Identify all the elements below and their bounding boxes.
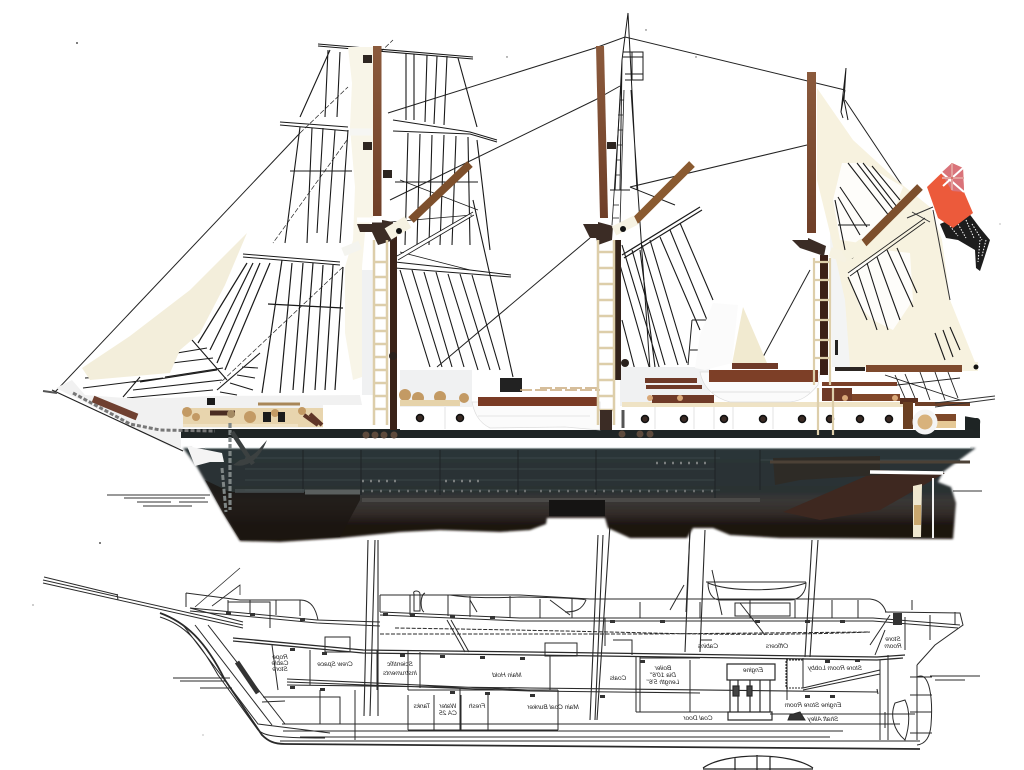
bow white structure xyxy=(43,380,362,466)
mirrored compartment labels: Water xyxy=(439,703,457,710)
ladders xyxy=(447,600,890,652)
fore sail strip xyxy=(345,47,375,395)
mirrored compartment labels: Coals xyxy=(609,675,626,682)
masts through hull xyxy=(364,525,818,720)
mirrored compartment labels: Main Coal Bunker xyxy=(526,704,579,711)
aft sail with rigging windows xyxy=(817,88,977,367)
anchor and chain xyxy=(222,410,267,512)
main mast base fitting xyxy=(600,410,623,430)
small boat at bottom edge xyxy=(703,755,813,770)
fore lower yard xyxy=(243,254,511,277)
jib sail xyxy=(82,233,247,380)
lifeboat on davits xyxy=(708,583,806,616)
water lines behind model hull xyxy=(107,491,982,506)
deck fittings xyxy=(182,378,995,432)
mirrored compartment labels: Rope xyxy=(272,654,288,661)
mirrored compartment labels: Room xyxy=(884,643,902,650)
rudder head rigging xyxy=(885,372,960,400)
bulwark with portholes xyxy=(400,367,912,430)
mirrored compartment labels: Length 5'6" xyxy=(646,679,679,686)
mirrored compartment labels: Cable xyxy=(271,660,288,667)
model hull xyxy=(183,448,976,542)
mirrored compartment labels: Boiler xyxy=(654,665,671,672)
mizzen ladder xyxy=(814,258,833,435)
hatches xyxy=(325,603,765,658)
main mast xyxy=(583,46,692,380)
fore upper yard xyxy=(318,44,473,59)
propeller shaft and screw xyxy=(770,676,932,745)
mirrored compartment labels: Instruments xyxy=(382,670,417,677)
hull planking xyxy=(245,450,960,500)
mizzen mast xyxy=(792,72,920,375)
stern wedge xyxy=(783,470,945,520)
rivet row xyxy=(362,490,713,492)
mirrored compartment labels: Officers xyxy=(765,643,788,650)
stern xyxy=(875,600,963,665)
mirrored compartment labels: Store xyxy=(272,666,288,673)
mirrored compartment labels: Dia 10'6" xyxy=(649,672,676,679)
rigging stays xyxy=(55,37,903,392)
mirrored compartment labels: Crew Space xyxy=(317,661,353,668)
plan waterline xyxy=(173,676,980,688)
brown bowsprit spar xyxy=(93,399,137,417)
fore brown spars xyxy=(343,132,470,252)
mirrored compartment labels: Fresh xyxy=(468,703,485,710)
mizzen boom xyxy=(835,362,978,372)
lower cutaway deck plan xyxy=(43,525,980,749)
fore ladder xyxy=(374,240,387,425)
main deck xyxy=(233,638,905,660)
hawse bolts xyxy=(362,430,654,438)
rudder xyxy=(913,484,922,537)
ventilators xyxy=(228,591,420,628)
red ensign flag xyxy=(927,163,990,271)
lower deck xyxy=(287,679,878,694)
bow chain xyxy=(73,393,215,431)
beams xyxy=(226,612,860,698)
white strip xyxy=(870,472,943,473)
fore second yard xyxy=(280,120,497,142)
mirrored compartment labels: Coal Door xyxy=(683,715,713,722)
mizzen top mast xyxy=(841,68,848,120)
bulkheads xyxy=(272,645,917,740)
mirrored compartment labels: Tanks xyxy=(413,703,431,710)
main gaff xyxy=(622,207,702,258)
mirrored compartment labels: Shaft Alley xyxy=(807,716,838,723)
lifeboat aft xyxy=(700,370,820,402)
mirrored compartment labels: Scientific xyxy=(386,661,413,668)
mirrored compartment labels: Main Hold xyxy=(492,672,522,679)
crow's nest xyxy=(623,52,643,80)
mizzen gaff sail block xyxy=(695,303,778,370)
engine xyxy=(727,664,775,720)
mirrored compartment labels: Store Room Lobby xyxy=(807,665,862,672)
mirrored compartment labels: Store xyxy=(885,636,901,643)
mirrored compartment labels: CA 25 xyxy=(439,710,457,717)
main ladder xyxy=(598,240,614,425)
mirrored compartment labels: Engine Store Room xyxy=(784,702,841,709)
spanker fan lines xyxy=(83,340,260,398)
fore mast sail drawing xyxy=(83,44,513,398)
brown deck planks xyxy=(645,378,697,383)
mirrored compartment labels: Cabins xyxy=(697,643,718,650)
mirrored compartment labels xyxy=(271,636,902,723)
main mast rigging xyxy=(610,13,715,370)
white hull stripe and black wale xyxy=(180,412,980,448)
stern cabin xyxy=(900,398,918,404)
forecastle rail xyxy=(186,593,380,626)
fore mast xyxy=(357,46,397,430)
dark bow shading xyxy=(205,480,360,540)
bowsprit xyxy=(43,577,243,628)
stem and keel xyxy=(160,613,920,749)
lifeboat forward xyxy=(472,397,600,430)
dark port xyxy=(549,500,605,516)
mirrored compartment labels: Engine xyxy=(743,667,763,674)
stern rail xyxy=(935,396,995,407)
upper deck and rail xyxy=(380,595,960,628)
rope ladder xyxy=(612,86,624,225)
